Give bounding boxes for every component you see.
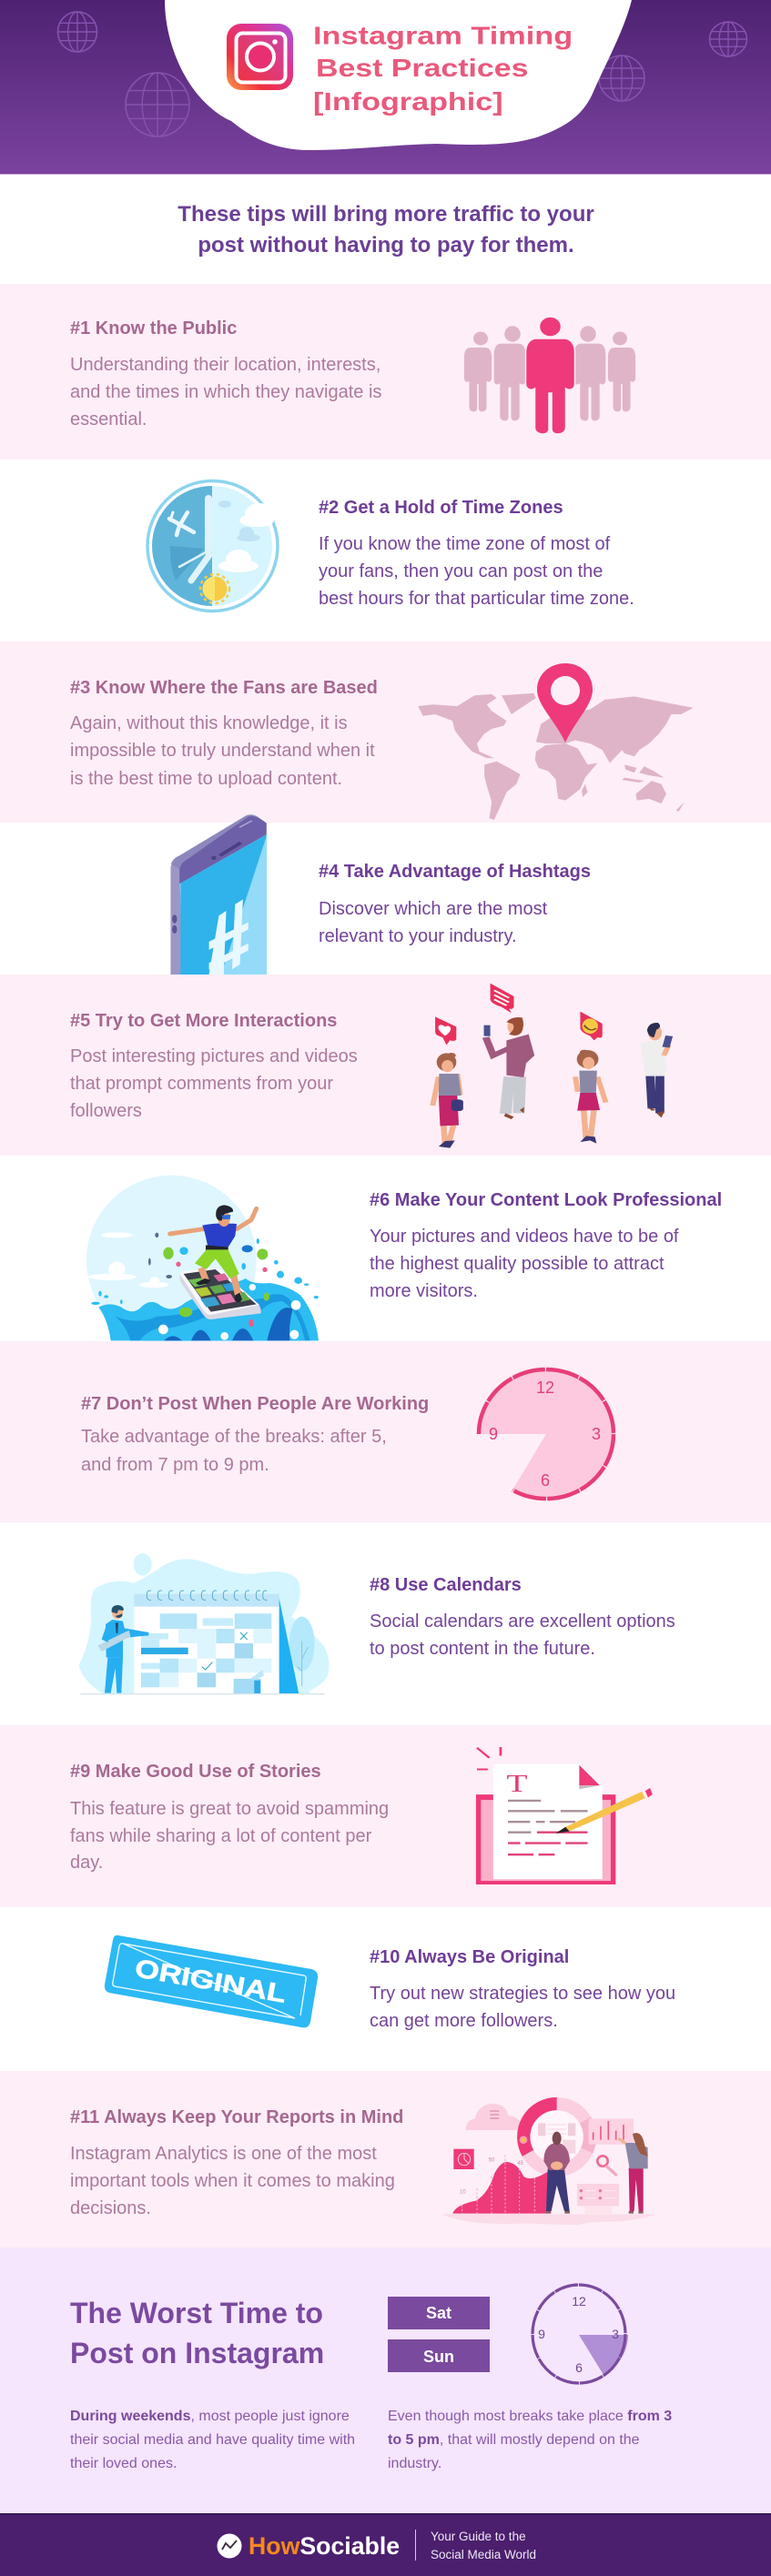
heading: Post on Instagram (70, 2337, 324, 2369)
body text: Your pictures and videos have to be of (370, 1227, 679, 1247)
icon: analytics illustration: 10 (460, 2189, 466, 2195)
icon: globe 3 (599, 56, 644, 101)
clock: working hours: 6 (541, 1471, 550, 1490)
woman 1 (432, 1053, 463, 1148)
label: Saturday (388, 2297, 490, 2329)
body text: that prompt comments from your (70, 1074, 333, 1094)
title: Best Practices (316, 54, 528, 82)
emoji bubble (580, 1012, 603, 1040)
icon: phone with hashtag (170, 814, 267, 975)
body text: can get more followers. (370, 2011, 558, 2031)
heading: #3 Know Where the Fans are Based (70, 678, 378, 698)
icon: sun (200, 574, 229, 603)
body text: Again, without this knowledge, it is (70, 713, 348, 733)
label: Saturday: Sat (426, 2304, 451, 2322)
body text: Discover which are the most (319, 899, 548, 919)
body text: weekends: their loved ones. (70, 2456, 177, 2471)
body text: day. (70, 1853, 103, 1873)
icon: globe 4 (710, 22, 746, 56)
woman (618, 2133, 648, 2214)
icon: document with pencil: T (506, 1770, 527, 1798)
icon: airplane (169, 512, 194, 535)
icon: heart bubble (435, 1016, 456, 1045)
tagline: Social Media World (431, 2548, 536, 2561)
icon: globe 2 (126, 73, 189, 136)
intro text: These tips will bring more traffic to your (178, 202, 594, 227)
title: [Infographic] (313, 87, 503, 116)
heading: #8 Use Calendars (370, 1575, 522, 1595)
panel: tip 11 (0, 2071, 771, 2248)
title (313, 21, 573, 116)
panel: tip 8 (79, 1553, 675, 1694)
man (543, 2132, 570, 2214)
message bubble (491, 984, 514, 1013)
title: Instagram Timing (313, 21, 573, 50)
panel: tip 5 (0, 975, 771, 1156)
clock: 3 to 5 pm: 9 (538, 2327, 545, 2341)
body text: Take advantage of the breaks: after 5, (81, 1427, 387, 1447)
body text: weekends: During weekends (70, 2409, 191, 2424)
panel: worst time to post (0, 2248, 771, 2513)
body text: relevant to your industry. (319, 926, 517, 946)
panel: tip 3 (0, 641, 771, 823)
panel: tip 6 (86, 1176, 722, 1345)
footer (0, 2513, 771, 2576)
clock: working hours: 9 (489, 1425, 498, 1443)
clock: 3 to 5 pm (533, 2285, 628, 2383)
body text: and from 7 pm to 9 pm. (81, 1455, 269, 1475)
man 1 (484, 1017, 534, 1119)
person (97, 1605, 148, 1693)
icon: calendar illustration (79, 1553, 330, 1694)
body text: impossible to truly understand when it (70, 741, 375, 761)
body text: breaks: to 5 pm (388, 2432, 440, 2448)
body text: Try out new strategies to see how you (370, 1984, 675, 2004)
clock: 3 to 5 pm: 6 (575, 2360, 583, 2375)
icon: ORIGINAL stamp (105, 1935, 318, 2027)
icon: ORIGINAL stamp: ORIGINAL (133, 1954, 289, 2008)
icon: HowSociable logo (217, 2533, 242, 2559)
intro text: post without having to pay for them. (198, 233, 574, 258)
panel: tip 10 (105, 1935, 675, 2031)
heading: #4 Take Advantage of Hashtags (319, 862, 591, 882)
icon: people with phones and speech bubbles (432, 984, 673, 1148)
body text: weekends: , most people just ignore (190, 2409, 350, 2424)
body text: best hours for that particular time zone. (319, 589, 634, 609)
body text: to post content in the future. (370, 1639, 595, 1659)
heading: #9 Make Good Use of Stories (70, 1762, 321, 1782)
heading: The Worst Time to (70, 2297, 323, 2329)
body text: Understanding their location, interests, (70, 355, 380, 375)
icon: surfer on phone wave (86, 1176, 319, 1345)
label: Sunday: Sun (423, 2348, 454, 2366)
body text: breaks: from 3 (627, 2409, 672, 2424)
surfer (170, 1205, 257, 1303)
panel: tip 2 (147, 480, 634, 611)
body text: followers (70, 1101, 142, 1121)
clock: working hours: 3 (592, 1425, 601, 1443)
body text: essential. (70, 409, 147, 429)
body text: breaks: industry. (388, 2456, 441, 2471)
body text: Instagram Analytics is one of the most (70, 2144, 377, 2164)
body text: If you know the time zone of most of (319, 534, 611, 554)
icon: document with pencil (476, 1747, 653, 1884)
white blob behind title (165, 0, 632, 150)
body text: is the best time to upload content. (70, 769, 342, 789)
icon: Instagram logo (227, 24, 293, 90)
icon: day and night clock (147, 480, 278, 611)
heading: #5 Try to Get More Interactions (70, 1011, 337, 1031)
phone surfboard (179, 1268, 261, 1319)
body text: This feature is great to avoid spamming (70, 1799, 389, 1819)
intro text (178, 202, 594, 258)
tagline: Your Guide to the (431, 2530, 526, 2543)
heading: #7 Don’t Post When People Are Working (81, 1394, 429, 1414)
icon: analytics illustration: 50 (489, 2158, 495, 2164)
icon: globe 1 (58, 12, 96, 52)
heading: #1 Know the Public (70, 318, 237, 338)
body text: weekends: their social media and have quality time with (70, 2432, 355, 2448)
icon: group of people (464, 317, 635, 434)
body text: important tools when it comes to making (70, 2171, 395, 2191)
clock: working hours (479, 1369, 614, 1499)
heading: #11 Always Keep Your Reports in Mind (70, 2107, 403, 2127)
label: Sunday (388, 2339, 490, 2372)
body text: your fans, then you can post on the (319, 561, 603, 581)
panel: tip 1 (0, 284, 771, 460)
body text: and the times in which they navigate is (70, 382, 381, 402)
brand name: HowSociable (249, 2532, 400, 2560)
heading: #6 Make Your Content Look Professional (370, 1190, 722, 1210)
heading: #2 Get a Hold of Time Zones (319, 498, 563, 518)
body text: Post interesting pictures and videos (70, 1046, 358, 1066)
body text: more visitors. (370, 1281, 478, 1301)
heading: #10 Always Be Original (370, 1947, 569, 1967)
body text: the highest quality possible to attract (370, 1254, 664, 1274)
woman 2 (575, 1050, 606, 1144)
heading (70, 2297, 324, 2369)
body text: decisions. (70, 2198, 151, 2218)
clock: 3 to 5 pm: 3 (612, 2327, 619, 2341)
body text: breaks: , that will mostly depend on the (440, 2432, 640, 2448)
panel: tip 7 (0, 1341, 771, 1522)
clock: working hours: 12 (536, 1379, 554, 1397)
icon: analytics illustration: 45 (517, 2161, 524, 2167)
clock: 3 to 5 pm: 12 (572, 2294, 586, 2308)
header banner (0, 0, 771, 175)
icon: location pin (537, 663, 593, 742)
body text: Social calendars are excellent options (370, 1611, 675, 1631)
body text: breaks: Even though most breaks take place (388, 2409, 627, 2424)
panel: tip 9 (0, 1725, 771, 1907)
body text: fans while sharing a lot of content per (70, 1826, 372, 1846)
panel: tip 4 (170, 814, 591, 975)
icon: world map (418, 693, 694, 820)
icon: analytics illustration (441, 2104, 655, 2225)
man 2 (641, 1023, 673, 1117)
